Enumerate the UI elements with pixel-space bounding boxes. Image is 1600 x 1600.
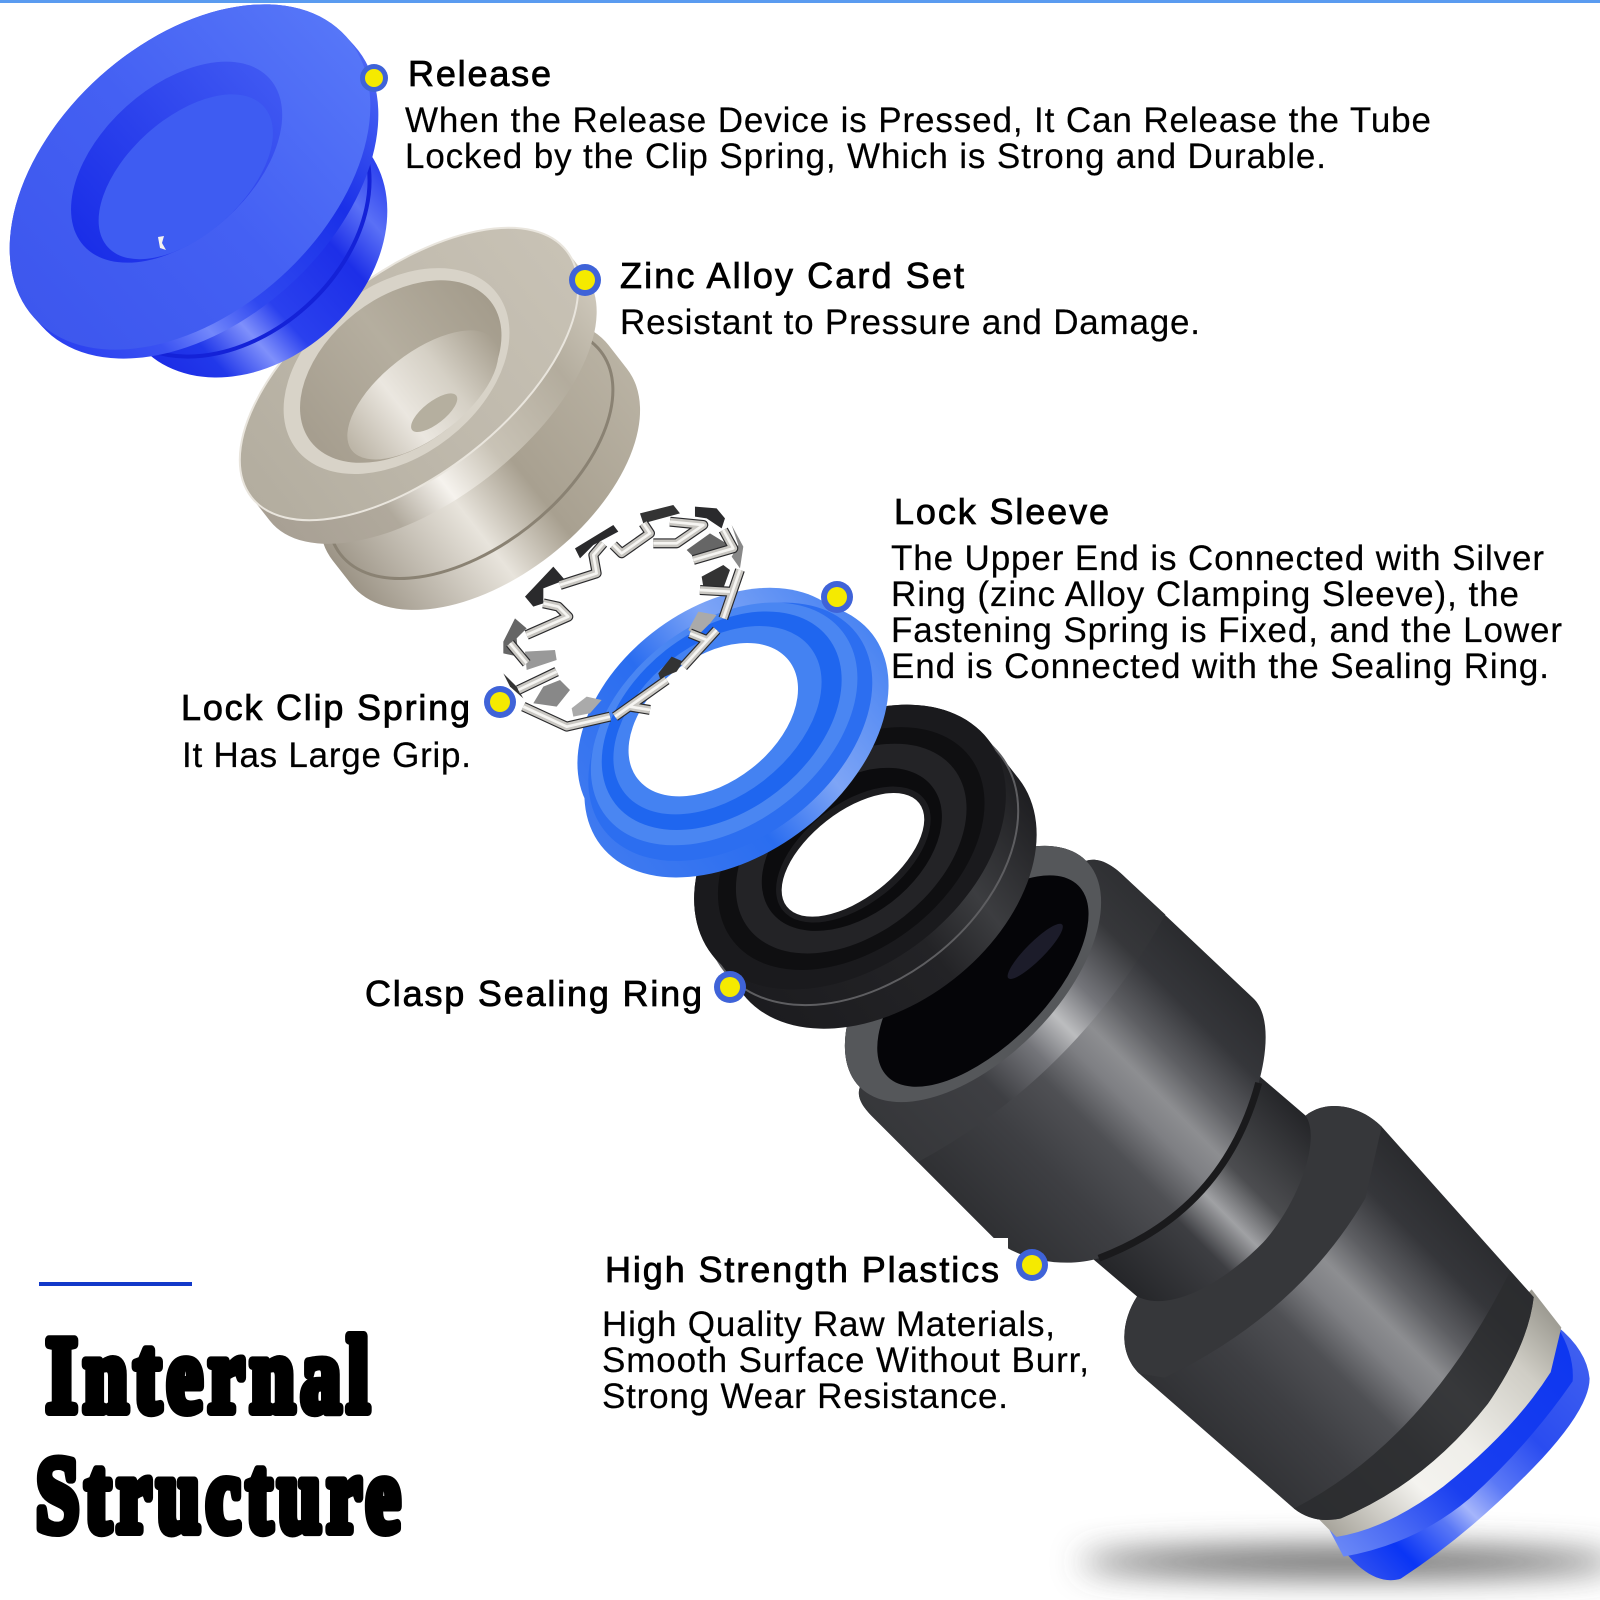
groove bbox=[1091, 1083, 1284, 1276]
callout: high strength plastics: Strong Wear Resistance. bbox=[602, 1377, 1008, 1416]
cylinder rim bbox=[800, 801, 1146, 1147]
callout: lock sleeve: Lock Sleeve bbox=[894, 491, 1109, 532]
top accent bar bbox=[0, 0, 1600, 3]
title rule bbox=[39, 1282, 192, 1286]
callout: high strength plastics: High Quality Raw Materials, bbox=[602, 1305, 1055, 1344]
callout: high strength plastics bbox=[602, 1249, 1089, 1416]
cylinder bore bbox=[842, 840, 1124, 1122]
callout: lock sleeve: Fastening Spring is Fixed, and the Lower bbox=[891, 611, 1562, 650]
callout: clasp sealing ring: Clasp Sealing Ring bbox=[365, 973, 702, 1014]
upper cylinder bbox=[791, 786, 1324, 1318]
callout: zinc alloy card set: Resistant to Pressure and Damage. bbox=[620, 303, 1200, 342]
title: Structure bbox=[36, 1436, 406, 1555]
title: Internal bbox=[46, 1315, 375, 1435]
part: clasp sealing ring bbox=[639, 646, 1091, 1087]
title bbox=[36, 1315, 406, 1555]
silver band bbox=[1310, 1289, 1589, 1568]
callout: lock sleeve: End is Connected with the Sealing Ring. bbox=[891, 647, 1549, 686]
callout: zinc alloy card set bbox=[569, 255, 1200, 342]
part: lock clip spring bbox=[503, 505, 743, 727]
part: blue lock sleeve bbox=[517, 527, 941, 934]
part: blue release cap bbox=[0, 0, 485, 471]
callout: lock clip spring: It Has Large Grip. bbox=[182, 736, 471, 775]
part: zinc alloy card set bbox=[190, 172, 708, 678]
ground shadow bbox=[1080, 1548, 1600, 1576]
callout: high strength plastics: High Strength Plastics bbox=[605, 1249, 999, 1290]
callout: release: Release bbox=[408, 53, 551, 94]
lower cylinder bbox=[1093, 1083, 1576, 1565]
callout: high strength plastics: Smooth Surface Without Burr, bbox=[602, 1341, 1089, 1380]
callout: lock sleeve: The Upper End is Connected with Silver bbox=[891, 539, 1544, 578]
callout: lock clip spring bbox=[181, 686, 516, 775]
part: high strength plastic body bbox=[791, 786, 1600, 1600]
callout: release bbox=[360, 53, 1431, 176]
callout: release: Locked by the Clip Spring, Which is Strong and Durable. bbox=[405, 137, 1326, 176]
callout: lock clip spring: Lock Clip Spring bbox=[181, 687, 470, 728]
mask patch beside label bbox=[960, 1238, 1008, 1272]
neck bbox=[1080, 1069, 1348, 1337]
lower cylinder shoulder band bbox=[1093, 1083, 1419, 1409]
cap highlight mark bbox=[158, 236, 166, 250]
upper cylinder chamfer band bbox=[791, 788, 1183, 1180]
callout: release: When the Release Device is Pressed, It Can Release the Tube bbox=[405, 101, 1431, 140]
blue end cap bbox=[1319, 1310, 1600, 1600]
callout: lock sleeve bbox=[821, 491, 1562, 686]
lower cylinder end band bbox=[1283, 1271, 1568, 1555]
callout: zinc alloy card set: Zinc Alloy Card Set bbox=[620, 255, 964, 296]
callout: lock sleeve: Ring (zinc Alloy Clamping Sleeve), the bbox=[891, 575, 1519, 614]
bore glint bbox=[1002, 918, 1068, 985]
